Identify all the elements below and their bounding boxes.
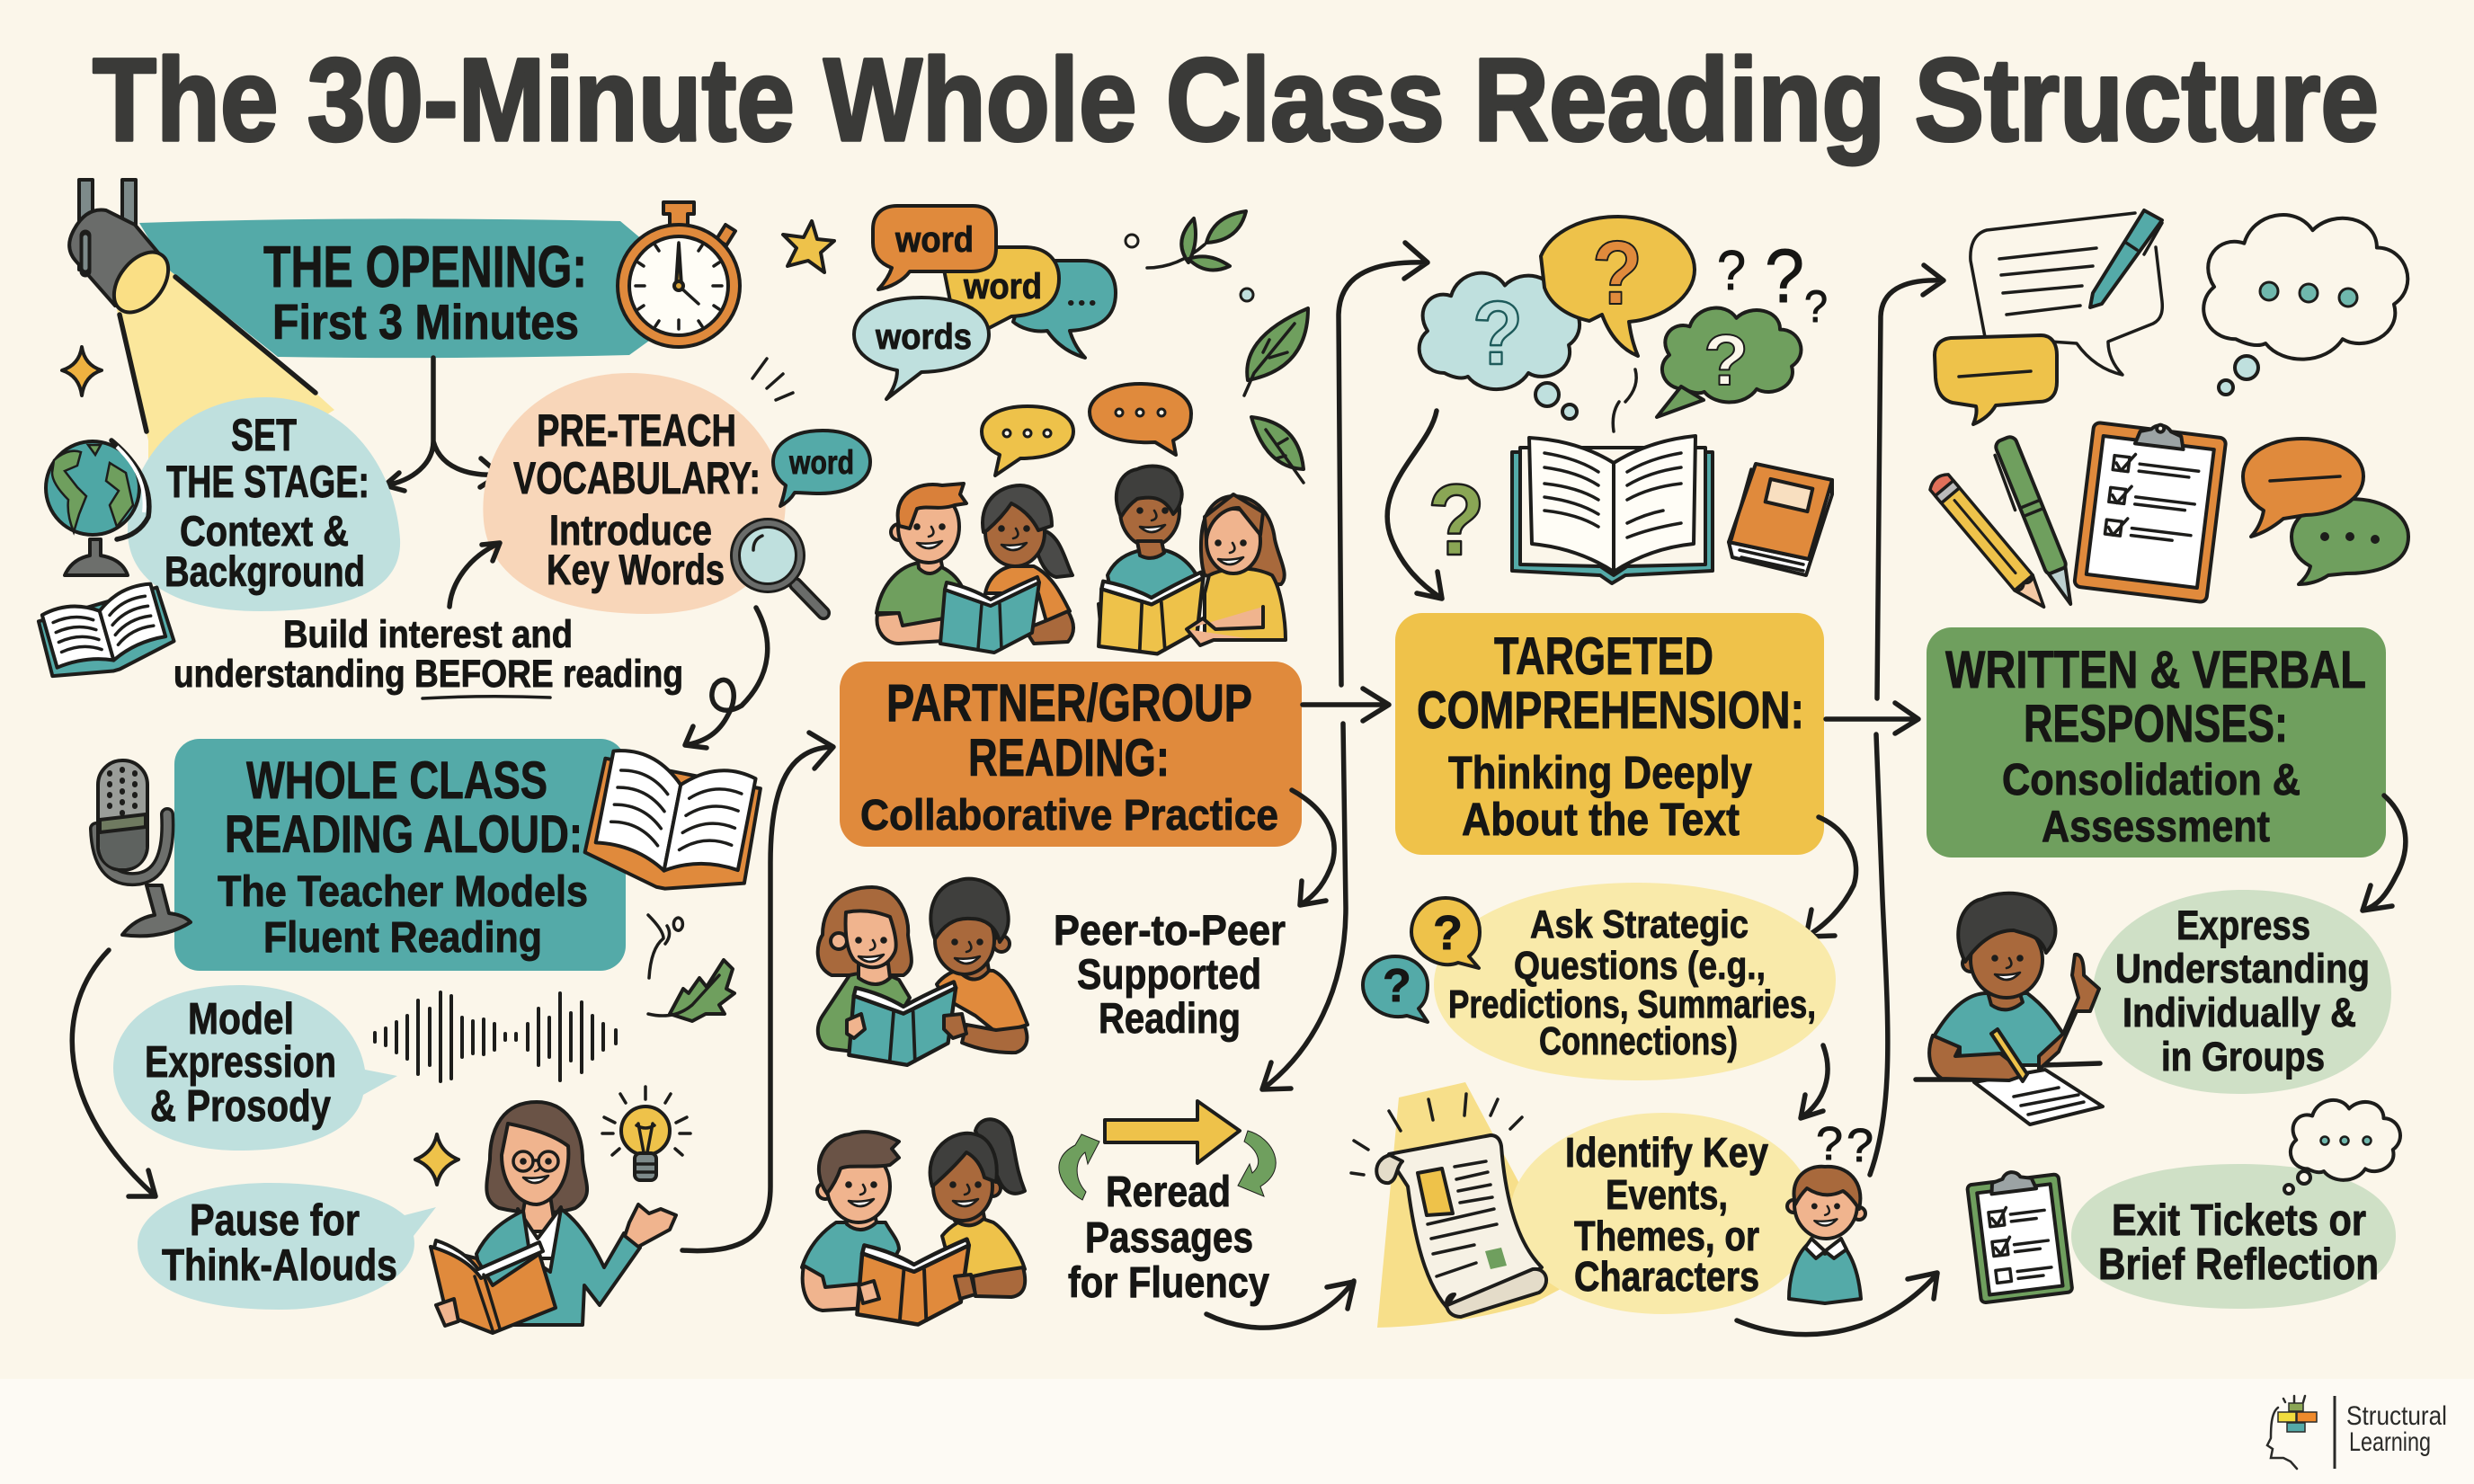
girl green shirt — [818, 887, 912, 1052]
icon: lightbulb — [602, 1087, 690, 1180]
arrow: targeted to ask — [1806, 817, 1856, 937]
panel: exit tickets — [2071, 1164, 2396, 1309]
panel: the opening banner — [139, 218, 710, 358]
icon: spotlight — [69, 180, 334, 512]
panel: express understanding — [2093, 890, 2391, 1094]
icon: sparkle gold — [415, 1134, 458, 1185]
boy teal shirt — [802, 1132, 899, 1311]
icon: open book orange — [581, 746, 765, 903]
arrow: upper right line to icons — [1877, 265, 1944, 698]
panel: whole class reading aloud: WHOLE CLASS — [246, 751, 547, 810]
icon: floating question marks: ? — [1765, 234, 1804, 318]
panel: identify key events: Identify Key — [1565, 1129, 1768, 1176]
girl yellow shirt — [930, 1119, 1025, 1297]
icon: green clipboard — [1966, 1167, 2072, 1303]
text: peer-to-peer: Reading — [1099, 994, 1241, 1042]
panel: exit tickets: Brief Reflection — [2098, 1240, 2379, 1289]
icon: written note bubble — [1971, 210, 2162, 375]
panel: model expression and prosody: Expression — [145, 1038, 336, 1087]
icon: floating question marks — [1717, 234, 1828, 332]
panel: express understanding: Individually & — [2122, 990, 2356, 1035]
book teal — [849, 982, 956, 1065]
text: build interest — [174, 613, 683, 698]
icon: green pen — [1989, 435, 2080, 610]
icon: small curious boy: ? — [1816, 1118, 1843, 1170]
arrow: opening to both sub-steps — [385, 358, 500, 491]
panel: ask strategic questions: Connections) — [1539, 1019, 1738, 1063]
icon: closed orange book — [1729, 464, 1832, 575]
text: build interest: understanding BEFORE reading — [174, 653, 683, 696]
arrow: partner to reread — [1262, 724, 1346, 1089]
icon: floating question marks: ? — [1804, 281, 1828, 332]
icon: teacher — [431, 1102, 676, 1333]
arrow: partner to peer — [1292, 790, 1334, 905]
arrow: ask to identify — [1801, 1045, 1828, 1118]
icon: question chat bubbles: ? — [1383, 960, 1411, 1012]
panel: model expression and prosody: Model — [188, 995, 294, 1044]
panel: whole class reading aloud: The Teacher Models — [218, 868, 588, 916]
boy with dark curly hair — [1099, 466, 1203, 636]
panel: written and verbal responses: Assessment — [2042, 803, 2270, 851]
icon: globe — [46, 440, 149, 575]
text: peer-to-peer: Peer-to-Peer — [1054, 906, 1286, 954]
icon: green question mark: ? — [1428, 464, 1485, 576]
illustration: peer pair reading — [818, 879, 1028, 1065]
panel: set the stage: Context & — [180, 507, 349, 555]
icon: yellow chat bubble — [982, 406, 1073, 475]
icon: sound waveform — [375, 992, 616, 1081]
panel: whole class reading aloud: READING ALOUD: — [225, 805, 583, 864]
icon: question bubbles: ? — [1473, 283, 1523, 384]
panel: the opening banner: First 3 Minutes — [272, 294, 579, 350]
panel: partner/group reading — [840, 662, 1302, 847]
arrow: mic to pause — [72, 950, 156, 1196]
panel: identify key events — [1377, 1082, 1814, 1328]
panel: the opening banner: THE OPENING: — [263, 234, 587, 299]
arrow: squiggle to whole class — [685, 608, 768, 748]
arrow: to question icons — [1339, 243, 1428, 685]
arrow: question area to targeted — [1387, 411, 1442, 599]
icon: word bubble teal: word — [788, 444, 854, 481]
text: reread passages: Passages — [1085, 1214, 1253, 1262]
panel: set the stage: Background — [165, 547, 365, 595]
text: reread passages: Reread — [1106, 1169, 1231, 1216]
book orange — [857, 1240, 969, 1325]
boy orange shirt — [930, 879, 1028, 1053]
panel: identify key events: Events, — [1606, 1171, 1728, 1218]
panel: ask strategic questions: Ask Strategic — [1530, 902, 1749, 946]
icon: pencil — [1927, 471, 2053, 615]
panel: exit tickets: Exit Tickets or — [2112, 1196, 2366, 1245]
icon: floating question marks: ? — [1717, 240, 1746, 302]
icon: yellow arrow — [1105, 1101, 1240, 1163]
arrow: lower line — [1870, 734, 1888, 1175]
panel: set the stage: THE STAGE: — [166, 457, 369, 507]
icon: small curious boy — [1787, 1118, 1873, 1303]
logo: structural learning: Structural — [2346, 1401, 2447, 1431]
icon: leaves and dots — [1126, 211, 1308, 483]
panel: pre-teach vocabulary — [483, 373, 786, 614]
panel: pre-teach vocabulary: Key Words — [547, 546, 725, 593]
book yellow — [1096, 573, 1206, 656]
icon: empty thought cloud — [2203, 215, 2407, 395]
arrow: partner to targeted — [1303, 689, 1389, 721]
panel: pre-teach vocabulary: Introduce — [549, 506, 712, 554]
text: reread passages: for Fluency — [1068, 1259, 1269, 1307]
panel: written and verbal responses: WRITTEN & VERBAL — [1945, 641, 2366, 699]
footer band — [0, 1379, 2474, 1484]
panel: written and verbal responses: RESPONSES: — [2024, 695, 2288, 753]
panel: whole class reading aloud — [174, 739, 626, 971]
panel: ask strategic questions — [1434, 883, 1836, 1080]
panel: partner/group reading: PARTNER/GROUP — [886, 674, 1252, 733]
icon: word bubble teal — [773, 431, 870, 506]
panel: pre-teach vocabulary: PRE-TEACH — [537, 405, 736, 456]
girl with dark ponytail — [983, 485, 1073, 644]
panel: set the stage: SET — [231, 410, 297, 460]
arrow: teacher to partner reading — [682, 733, 833, 1251]
icon: question bubbles — [1419, 217, 1801, 419]
panel: targeted comprehension: COMPREHENSION: — [1417, 681, 1804, 740]
icon: star — [783, 221, 834, 272]
icon: book squiggles — [1613, 369, 1636, 431]
panel: written and verbal responses — [1927, 627, 2386, 858]
icon: microphone — [96, 760, 191, 936]
icon: magnifying glass — [735, 523, 823, 613]
panel: express understanding: Express — [2176, 902, 2310, 948]
text: peer-to-peer: Supported — [1077, 950, 1261, 998]
panel: written and verbal responses: Consolidation & — [2002, 756, 2300, 804]
panel: pause for think-alouds — [138, 1183, 436, 1310]
panel: targeted comprehension: About the Text — [1462, 794, 1740, 845]
icon: word speech bubbles: words — [875, 317, 972, 357]
arrow: targeted to written — [1826, 703, 1918, 733]
icon: word speech bubbles: word — [894, 220, 974, 260]
icon: word speech bubbles: word — [963, 267, 1042, 307]
panel: identify key events: Characters — [1574, 1253, 1759, 1300]
icon: question bubbles: ? — [1592, 223, 1642, 324]
panel: model expression and prosody — [113, 985, 397, 1151]
illustration: student writing and raising finger — [1916, 893, 2103, 1124]
logo: structural learning — [2267, 1396, 2447, 1469]
arrow: written to express — [2363, 795, 2406, 911]
panel: identify key events: Themes, or — [1574, 1213, 1759, 1259]
book teal — [940, 577, 1039, 653]
panel: partner/group reading: Collaborative Practice — [860, 792, 1278, 840]
text: build interest: Build interest and — [283, 613, 573, 656]
icon: large open book — [1512, 436, 1713, 583]
icon: scroll with key passage — [1351, 1094, 1546, 1317]
text: peer-to-peer — [1054, 906, 1286, 1042]
arrow: scroll to exit tickets — [1737, 1273, 1937, 1335]
icon: yellow dash bubble — [1935, 335, 2057, 424]
icon: orange chat bubble — [1090, 384, 1191, 455]
panel: set the stage — [128, 397, 400, 611]
panel: targeted comprehension — [1395, 613, 1824, 855]
icon: green cycle arrows — [1059, 1131, 1276, 1200]
icon: stopwatch — [618, 202, 740, 347]
arrow: reread to scroll — [1206, 1281, 1354, 1328]
panel: ask strategic questions: Predictions, Summaries, — [1448, 982, 1816, 1026]
icon: word speech bubbles — [854, 206, 1116, 399]
arrow: note to pre-teach — [449, 543, 500, 607]
icon: question chat bubbles — [1363, 898, 1480, 1022]
panel: express understanding: Understanding — [2115, 946, 2370, 991]
text: reread passages — [1068, 1169, 1269, 1307]
icon: small thought cloud — [2284, 1100, 2400, 1194]
icon: emphasis lines — [752, 359, 793, 400]
icon: orange clipboard — [2074, 417, 2227, 602]
panel: pause for think-alouds: Think-Alouds — [162, 1241, 397, 1290]
icon: open book small — [35, 581, 177, 688]
illustration: four children reading — [877, 466, 1286, 656]
logo: structural learning: Learning — [2349, 1427, 2431, 1457]
icon: question chat bubbles: ? — [1433, 906, 1463, 960]
panel: partner/group reading: READING: — [968, 729, 1170, 787]
boy with orange hair — [877, 484, 966, 644]
icon: squiggle and leaf — [648, 915, 734, 1021]
panel: ask strategic questions: Questions (e.g., — [1514, 944, 1766, 988]
panel: whole class reading aloud: Fluent Reading — [263, 914, 542, 962]
panel: targeted comprehension: Thinking Deeply — [1448, 747, 1753, 798]
panel: pre-teach vocabulary: VOCABULARY: — [513, 453, 761, 503]
panel: pause for think-alouds: Pause for — [190, 1196, 360, 1245]
icon: orange and green chat bubbles — [2243, 439, 2408, 584]
illustration: pair with orange book — [802, 1119, 1025, 1325]
panel: model expression and prosody: & Prosody — [150, 1082, 331, 1131]
panel: targeted comprehension: TARGETED — [1494, 627, 1713, 686]
icon: small curious boy: ? — [1847, 1120, 1873, 1172]
icon: question bubbles: ? — [1704, 320, 1749, 400]
icon: sparkle — [62, 347, 102, 395]
panel: express understanding: in Groups — [2161, 1034, 2325, 1080]
girl with brown hair — [1187, 494, 1286, 645]
